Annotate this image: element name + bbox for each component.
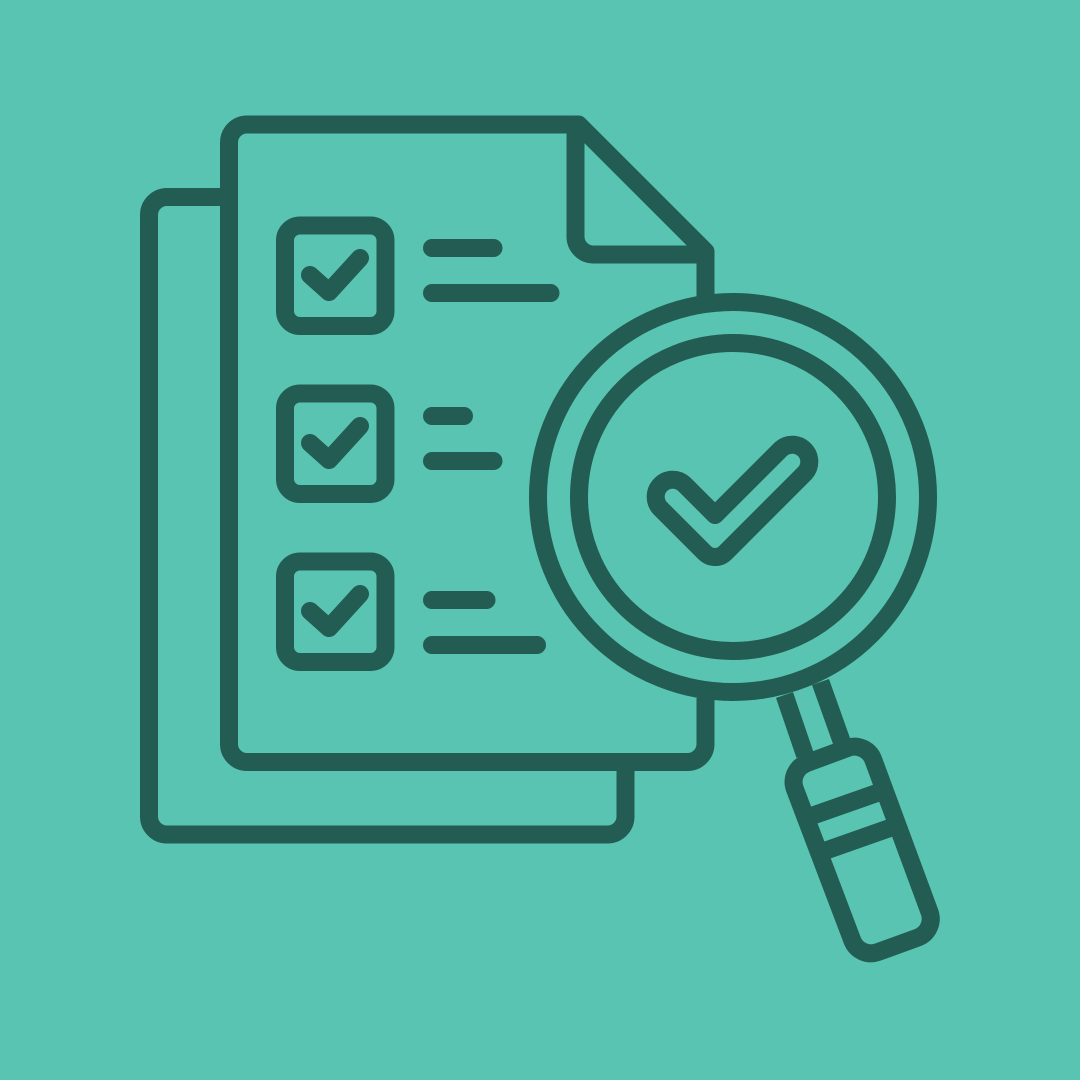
list lines 3: [432, 600, 537, 645]
checkbox 1: [285, 226, 386, 326]
checkbox 2: [285, 394, 386, 494]
page fold: [576, 125, 705, 254]
magnifier neck: [784, 682, 842, 755]
magnifier handle: [794, 747, 931, 953]
front page: [229, 124, 706, 762]
list lines 2: [432, 416, 494, 461]
large check mark: [656, 445, 809, 557]
magnifier outer ring: [538, 302, 928, 692]
magnifier inner ring: [579, 343, 887, 651]
list lines 1: [432, 248, 550, 293]
back page: [149, 197, 626, 834]
checkbox 3: [285, 562, 386, 662]
